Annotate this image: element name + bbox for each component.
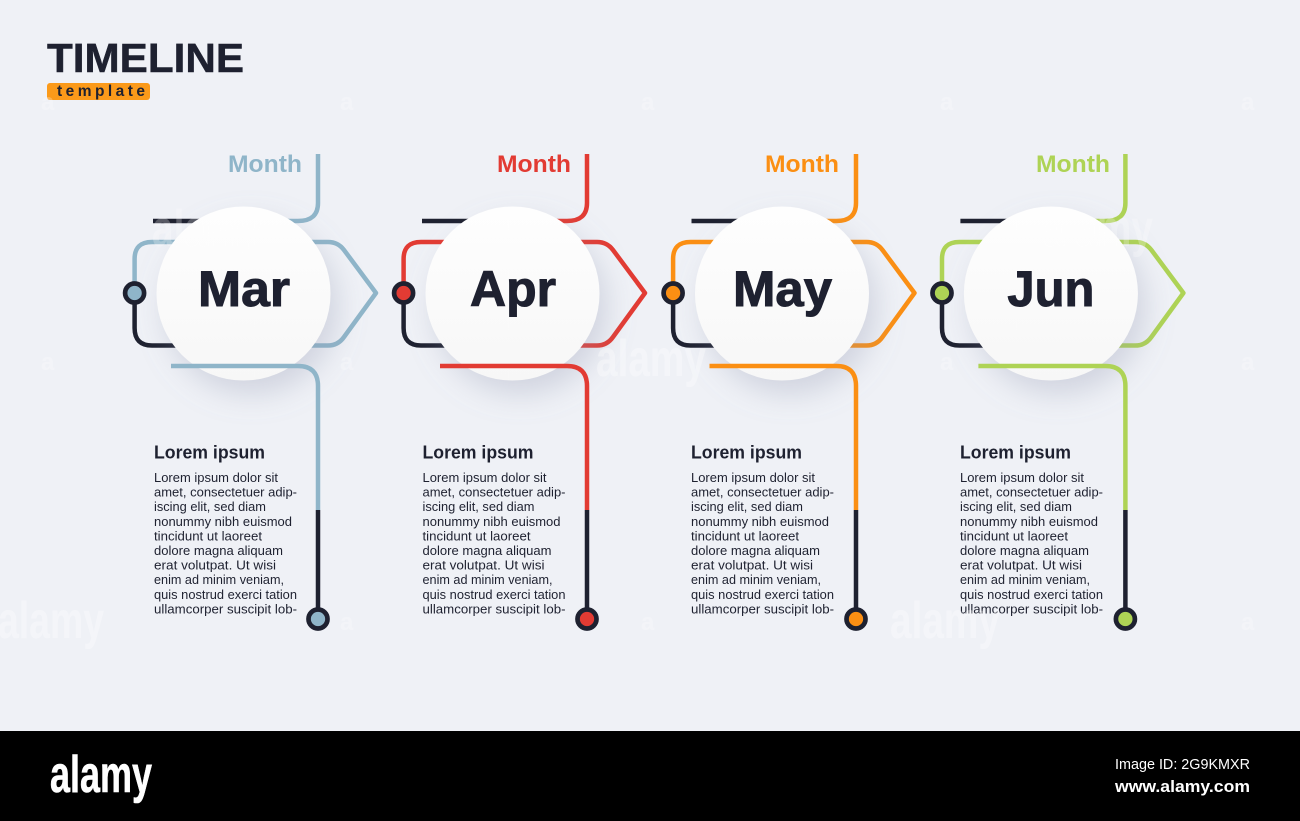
text block: April: enim ad minim veniam, <box>422 572 552 587</box>
text block: May: dolore magna aliquam <box>691 543 820 558</box>
dark line to end node: April <box>585 510 589 608</box>
text block: March <box>154 442 297 616</box>
text block: June: Lorem ipsum <box>960 442 1071 462</box>
text block: April: quis nostrud exerci tation <box>422 587 566 602</box>
text block: March: Lorem ipsum dolor sit <box>154 470 278 485</box>
watermarks: alamy <box>1043 200 1153 258</box>
text block: April: dolore magna aliquam <box>422 543 552 558</box>
text block: March: amet, consectetuer adip- <box>154 485 297 500</box>
watermarks: alamy <box>152 200 262 258</box>
watermarks: a <box>1241 349 1255 376</box>
dark line to end node: May <box>854 510 858 608</box>
text block: May: amet, consectetuer adip- <box>691 485 834 500</box>
circle: April <box>426 206 600 380</box>
left node: April <box>394 284 413 302</box>
text block: March: erat volutpat. Ut wisi <box>154 558 276 573</box>
connector lines behind circle: June <box>942 154 1183 346</box>
month label: May: Month <box>765 151 839 178</box>
month name: Apr: Apr <box>470 261 556 317</box>
left node: May <box>664 284 683 302</box>
watermarks: alamy <box>0 592 104 650</box>
connector lines behind circle: April <box>404 154 645 346</box>
text block: March: Lorem ipsum <box>154 442 265 462</box>
text block: June: nonummy nibh euismod <box>960 514 1098 529</box>
text block: April <box>422 442 566 616</box>
text block: March: ullamcorper suscipit lob- <box>154 601 297 616</box>
circle: May <box>695 206 869 380</box>
text block: April: erat volutpat. Ut wisi <box>422 558 545 573</box>
text block: April: tincidunt ut laoreet <box>422 528 531 543</box>
line to text: April <box>440 366 587 510</box>
line to text: May <box>710 366 856 510</box>
dark line to end node: March <box>316 510 320 608</box>
watermarks <box>0 89 1255 650</box>
text block: June: dolore magna aliquam <box>960 543 1089 558</box>
title <box>47 35 244 100</box>
end node: April <box>578 610 596 628</box>
footer bar <box>0 731 1300 821</box>
text block: June: quis nostrud exerci tation <box>960 587 1103 602</box>
footer logo: alamy <box>50 746 152 804</box>
text block: May: erat volutpat. Ut wisi <box>691 558 813 573</box>
text block: May: nonummy nibh euismod <box>691 514 829 529</box>
month name: May: May <box>733 261 832 317</box>
circle: March <box>156 206 330 380</box>
text block: May: Lorem ipsum dolor sit <box>691 470 815 485</box>
end node: June <box>1116 610 1135 628</box>
column: May <box>664 151 914 628</box>
watermarks: a <box>340 89 354 116</box>
circle: June <box>964 206 1138 380</box>
text block: June: amet, consectetuer adip- <box>960 485 1103 500</box>
watermarks: a <box>41 349 55 376</box>
text block: May: ullamcorper suscipit lob- <box>691 601 834 616</box>
text block: March: nonummy nibh euismod <box>154 514 292 529</box>
text block: June: enim ad minim veniam, <box>960 572 1090 587</box>
text block: March: enim ad minim veniam, <box>154 572 284 587</box>
watermarks: a <box>340 609 354 636</box>
text block: May: enim ad minim veniam, <box>691 572 821 587</box>
text block: April: amet, consectetuer adip- <box>422 485 566 500</box>
left node: March <box>125 284 144 302</box>
text block: May: iscing elit, sed diam <box>691 499 803 514</box>
text block: April: nonummy nibh euismod <box>422 514 560 529</box>
month name: Jun: Jun <box>1007 261 1094 317</box>
text block: June: Lorem ipsum dolor sit <box>960 470 1084 485</box>
text block: May: quis nostrud exerci tation <box>691 587 834 602</box>
badge: template: template <box>57 83 145 100</box>
text block: June: ullamcorper suscipit lob- <box>960 601 1103 616</box>
watermarks: a <box>641 89 655 116</box>
line to text: March <box>171 366 318 510</box>
text block: April: Lorem ipsum dolor sit <box>422 470 547 485</box>
text block: June: iscing elit, sed diam <box>960 499 1072 514</box>
watermarks: alamy <box>890 592 1000 650</box>
line to text: June <box>978 366 1125 510</box>
text block: May <box>691 442 834 616</box>
text block: June <box>960 442 1103 616</box>
text block: April: iscing elit, sed diam <box>422 499 534 514</box>
image id: Image ID: 2G9KMXR <box>1115 756 1250 773</box>
text block: May: Lorem ipsum <box>691 442 802 462</box>
text block: June: tincidunt ut laoreet <box>960 528 1068 543</box>
end node: May <box>846 610 866 628</box>
text block: April: ullamcorper suscipit lob- <box>422 601 566 616</box>
month label: April: Month <box>497 151 571 178</box>
text block: May: tincidunt ut laoreet <box>691 528 799 543</box>
title: TIMELINE <box>47 35 244 81</box>
watermarks: a <box>641 609 655 636</box>
website: www.alamy.com <box>1114 777 1250 796</box>
connector lines behind circle: May <box>673 154 914 346</box>
text block: March: dolore magna aliquam <box>154 543 283 558</box>
text block: March: quis nostrud exerci tation <box>154 587 297 602</box>
left node: June <box>932 284 952 302</box>
column: April <box>394 151 645 628</box>
column: March <box>125 151 376 628</box>
month label: June: Month <box>1036 151 1110 178</box>
text block: April: Lorem ipsum <box>422 442 534 462</box>
watermarks: a <box>1241 609 1255 636</box>
dark line to end node: June <box>1123 510 1128 608</box>
text block: June: erat volutpat. Ut wisi <box>960 558 1082 573</box>
month label: March: Month <box>228 151 302 178</box>
watermarks: a <box>940 89 954 116</box>
watermarks: a <box>340 349 354 376</box>
text block: March: iscing elit, sed diam <box>154 499 266 514</box>
end node: March <box>308 610 328 628</box>
watermarks: a <box>41 89 55 116</box>
column: June <box>932 151 1183 628</box>
month name: Mar: Mar <box>198 261 290 317</box>
text block: March: tincidunt ut laoreet <box>154 528 262 543</box>
watermarks: alamy <box>596 330 706 388</box>
watermarks: a <box>940 349 954 376</box>
connector lines behind circle: March <box>135 154 376 346</box>
watermarks: a <box>1241 89 1255 116</box>
